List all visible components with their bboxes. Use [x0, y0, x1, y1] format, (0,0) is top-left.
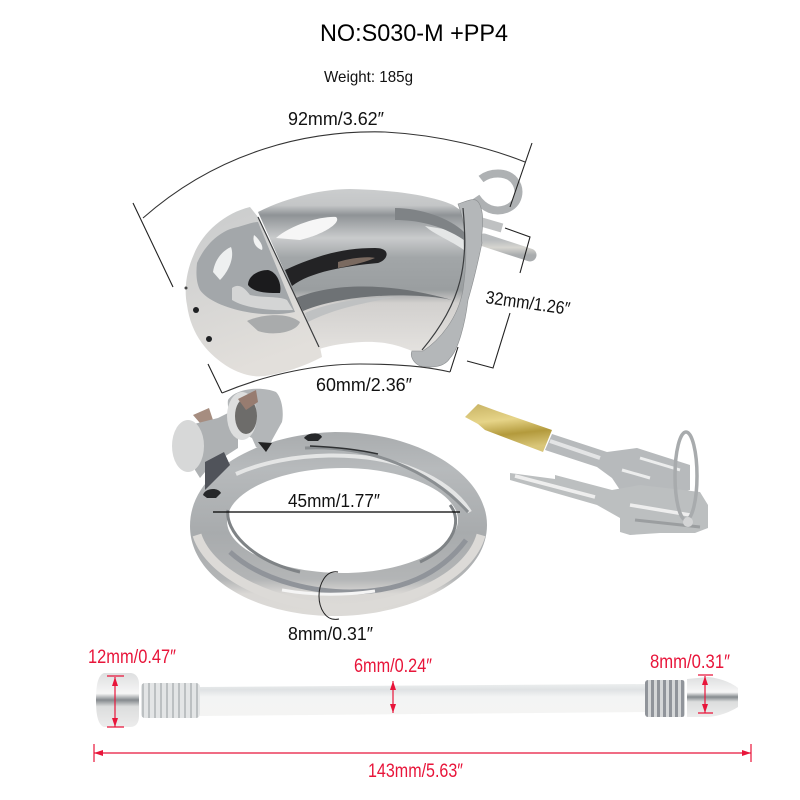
- red dimension: 8mm tip: 8mm/0.31″: [650, 652, 730, 673]
- ring highlights: [197, 446, 481, 608]
- dimension: 8mm ring thickness: 8mm/0.31″: [288, 624, 374, 644]
- rod tube: [200, 684, 645, 716]
- base ring illustration: [172, 389, 487, 616]
- cage end cap: [186, 207, 322, 376]
- dimension: 8mm ring thickness: [288, 572, 374, 644]
- red dimension: 143mm overall length: 143mm/5.63″: [368, 761, 463, 782]
- upper key with brass cylinder: [465, 404, 690, 500]
- keys and brass lock illustration: [465, 404, 708, 535]
- cage main body: [258, 189, 466, 352]
- red dimension: 8mm tip: [650, 652, 730, 713]
- red dimension: 12mm head: 12mm/0.47″: [88, 647, 176, 668]
- locking pins: [478, 221, 530, 255]
- dimension: 45mm inner diameter: 45mm/1.77″: [288, 491, 381, 511]
- dimension: 32mm height: [467, 228, 572, 368]
- red dimension: 6mm tube: 6mm/0.24″: [354, 656, 432, 677]
- rod threaded collar left: [141, 683, 200, 718]
- front ring band: [411, 200, 483, 367]
- ring band: [190, 432, 487, 616]
- key ring: [675, 432, 697, 527]
- weight label: Weight: 185g: [324, 69, 413, 86]
- red dimension: 12mm head: [88, 647, 176, 727]
- rod tip: [687, 677, 738, 717]
- dimension: 92mm arc: 92mm/3.62″: [288, 109, 385, 129]
- lock hook: [476, 174, 518, 210]
- dimension: 60mm arc: [208, 347, 458, 395]
- ring holes: [203, 433, 322, 498]
- rod illustration: [96, 673, 738, 727]
- body reflections: [276, 208, 464, 322]
- seam lines: [258, 208, 465, 350]
- cage photo illustration: [184, 174, 530, 376]
- dimension: 60mm arc: 60mm/2.36″: [316, 375, 413, 395]
- rod threaded collar right: [645, 680, 685, 717]
- dimension: 32mm height: 32mm/1.26″: [484, 287, 572, 319]
- lock lugs: [172, 389, 283, 490]
- dimension: 92mm arc: [133, 109, 532, 287]
- cap reflections: [184, 222, 300, 342]
- title: NO:S030-M +PP4: [320, 20, 508, 47]
- red dimension: 6mm tube: [354, 656, 432, 713]
- red dimension: 143mm overall length: [94, 744, 751, 782]
- rod head: [96, 673, 139, 727]
- lower key: [510, 473, 708, 535]
